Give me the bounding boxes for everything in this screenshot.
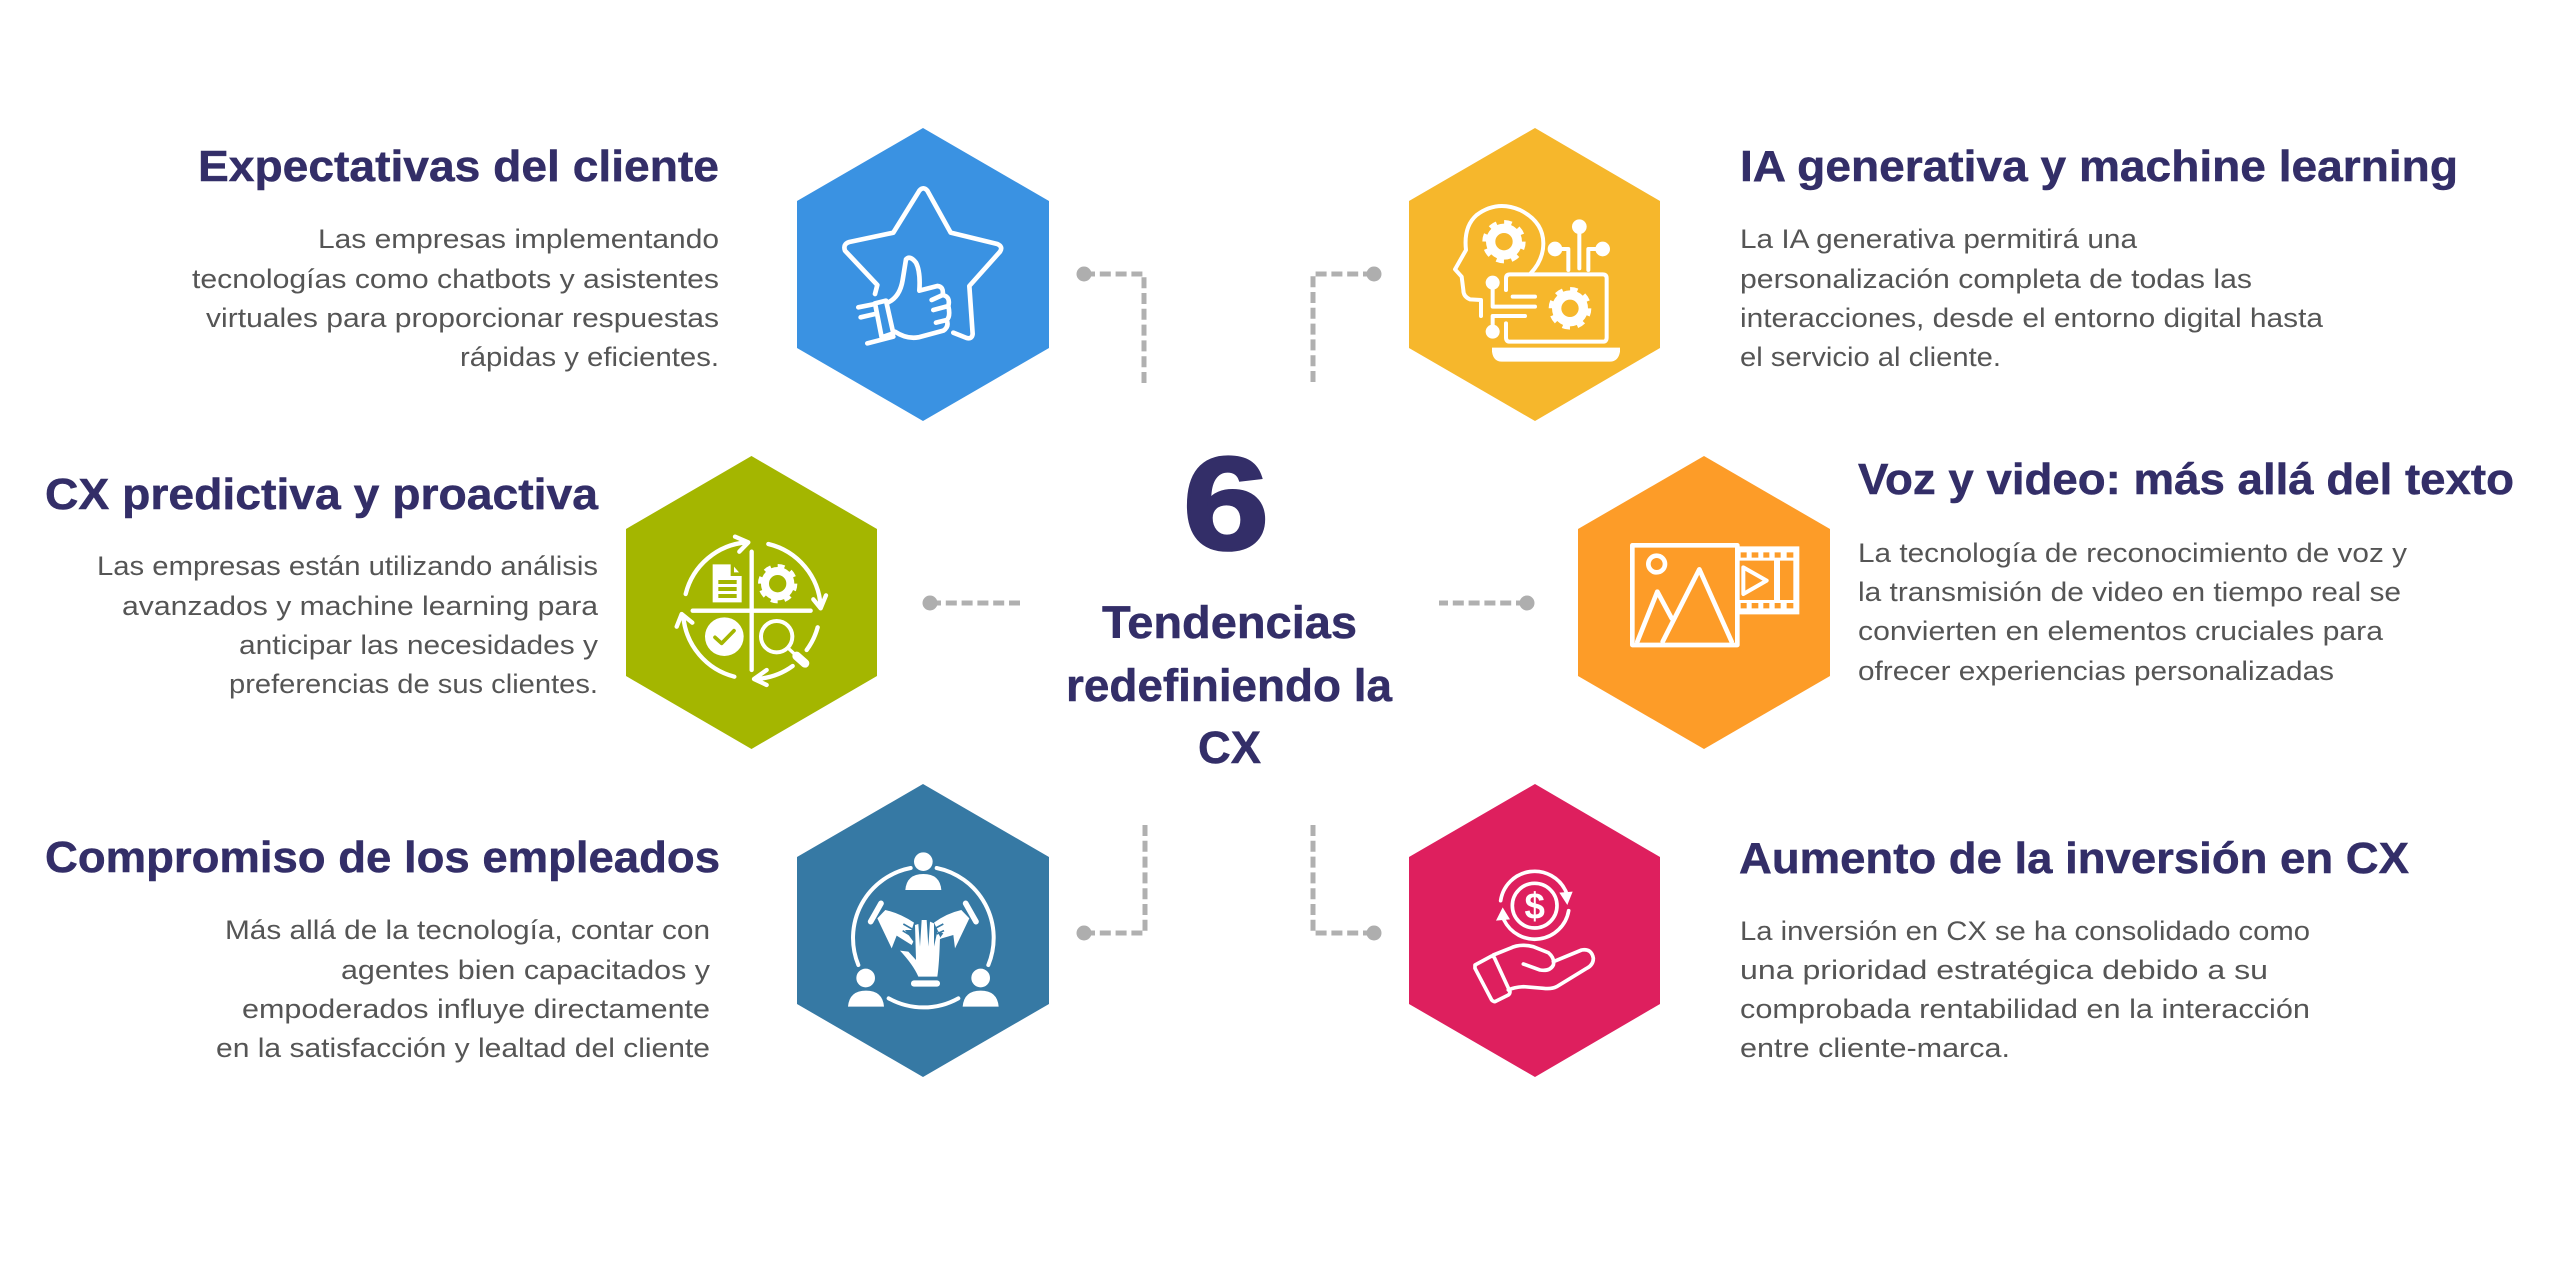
icon: team hands [848, 852, 999, 1007]
body text [216, 915, 711, 1063]
connector: top left [1076, 266, 1144, 383]
panel: Expectativas del cliente [192, 128, 1049, 421]
hexagon: blue [797, 128, 1049, 421]
hexagon: pink [1409, 784, 1660, 1077]
body text: Más allá de la tecnología, contar con [225, 915, 710, 945]
body text: interacciones, desde el entorno digital hasta [1740, 303, 2324, 333]
center heading: CX [1198, 722, 1261, 773]
body text: en la satisfacción y lealtad del cliente [216, 1033, 710, 1063]
icon: star with thumbs up [844, 188, 1001, 343]
connector: bottom left [1076, 824, 1145, 940]
center heading: Tendencias [1102, 597, 1357, 648]
panel: Voz y video [1578, 455, 2514, 749]
body text: agentes bien capacitados y [341, 955, 711, 985]
icon: AI head and laptop [1455, 206, 1620, 362]
body text: empoderados influye directamente [242, 994, 710, 1024]
heading: Compromiso de los empleados [45, 833, 720, 882]
body text: anticipar las necesidades y [239, 630, 599, 660]
body text: personalización completa de todas las [1740, 264, 2252, 294]
connector: bottom right [1313, 824, 1382, 940]
body text: Las empresas implementando [318, 224, 719, 254]
body text: entre cliente-marca. [1740, 1033, 2010, 1063]
panel: CX predictiva y proactiva [45, 456, 877, 749]
body text: comprobada rentabilidad en la interacción [1740, 994, 2310, 1024]
center heading [1066, 597, 1393, 773]
icon: hand with dollar coin: $ [1524, 886, 1545, 927]
body text: ofrecer experiencias personalizadas [1858, 656, 2334, 686]
panel: Aumento de la inversión en CX [1409, 784, 2409, 1077]
body text: Las empresas están utilizando análisis [97, 551, 598, 581]
icon: image and film strip [1632, 545, 1799, 645]
body text [1740, 224, 2324, 372]
heading: IA generativa y machine learning [1740, 142, 2458, 191]
hexagon: orange [1578, 456, 1830, 749]
hexagon: teal [797, 784, 1049, 1077]
body text: La IA generativa permitirá una [1740, 224, 2138, 254]
connector: top right [1313, 266, 1382, 383]
body text: La inversión en CX se ha consolidado como [1740, 916, 2310, 946]
body text: convierten en elementos cruciales para [1858, 616, 2384, 646]
icon: hand with dollar coin [1475, 871, 1593, 1002]
panel: IA generativa y machine learning [1409, 128, 2458, 421]
connector: middle right [1439, 596, 1534, 610]
heading: Expectativas del cliente [198, 142, 719, 191]
body text [1740, 916, 2310, 1063]
icon: process cycle [677, 537, 826, 685]
body text [192, 224, 719, 372]
heading: CX predictiva y proactiva [45, 470, 599, 519]
body text: una prioridad estratégica debido a su [1740, 955, 2268, 985]
panel: center title [1066, 430, 1393, 773]
body text: avanzados y machine learning para [122, 591, 599, 621]
body text [1858, 538, 2408, 686]
connector: middle left [922, 596, 1020, 610]
body text [97, 551, 599, 699]
hexagon: yellow [1409, 128, 1660, 421]
center heading: redefiniendo la [1066, 660, 1393, 711]
body text: preferencias de sus clientes. [229, 669, 598, 699]
heading: Aumento de la inversión en CX [1739, 834, 2409, 883]
body text: virtuales para proporcionar respuestas [206, 303, 719, 333]
big number 6: 6 [1183, 430, 1269, 577]
heading: Voz y video: más allá del texto [1858, 455, 2514, 504]
body text: la transmisión de video en tiempo real se [1858, 577, 2401, 607]
body text: tecnologías como chatbots y asistentes [192, 264, 719, 294]
panel: Compromiso de los empleados [45, 784, 1049, 1077]
hexagon: green [626, 456, 877, 749]
body text: el servicio al cliente. [1740, 342, 2001, 372]
body text: rápidas y eficientes. [460, 342, 719, 372]
body text: La tecnología de reconocimiento de voz y [1858, 538, 2408, 568]
